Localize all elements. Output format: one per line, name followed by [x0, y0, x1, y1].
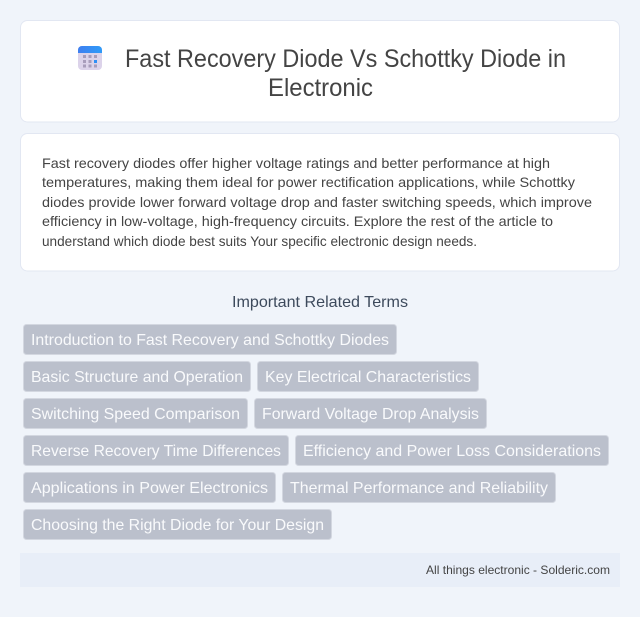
panel: introduction text: temperatures, making them ideal for power rectification applications, while Schottky	[42, 174, 575, 190]
panel: introduction text: understand which diode best suits Your specific electronic design needs.	[42, 233, 477, 249]
icon: calendar	[78, 46, 102, 70]
tag list: Forward Voltage Drop Analysis	[262, 406, 479, 423]
tag list: Basic Structure and Operation	[31, 369, 243, 386]
title: Fast Recovery Diode Vs Schottky Diode in	[125, 45, 566, 73]
panel: introduction text	[20, 134, 620, 271]
panel: introduction text: Fast recovery diodes offer higher voltage ratings and better performance at high	[42, 155, 550, 171]
tag list: Efficiency and Power Loss Considerations	[303, 443, 601, 460]
tag list: Thermal Performance and Reliability	[290, 480, 548, 497]
tag list: Reverse Recovery Time Differences	[31, 443, 281, 460]
footer	[20, 553, 620, 587]
tag list: Applications in Power Electronics	[31, 480, 268, 497]
panel: header	[20, 20, 620, 122]
panel: introduction text: diodes provide lower forward voltage drop and faster switching speeds, which improve	[42, 194, 592, 210]
heading: important related terms: Important Related Terms	[232, 294, 408, 311]
tag list: Key Electrical Characteristics	[265, 369, 471, 386]
tag list: Introduction to Fast Recovery and Schottky Diodes	[31, 332, 389, 349]
title: Electronic	[268, 74, 373, 102]
tag list	[24, 324, 608, 540]
panel: introduction text: efficiency in low-voltage, high-frequency circuits. Explore the rest of the article to	[42, 213, 553, 229]
title	[125, 45, 566, 102]
footer: All things electronic - Solderic.com	[426, 563, 610, 577]
tag list: Switching Speed Comparison	[31, 406, 240, 423]
tag list: Choosing the Right Diode for Your Design	[31, 517, 324, 534]
